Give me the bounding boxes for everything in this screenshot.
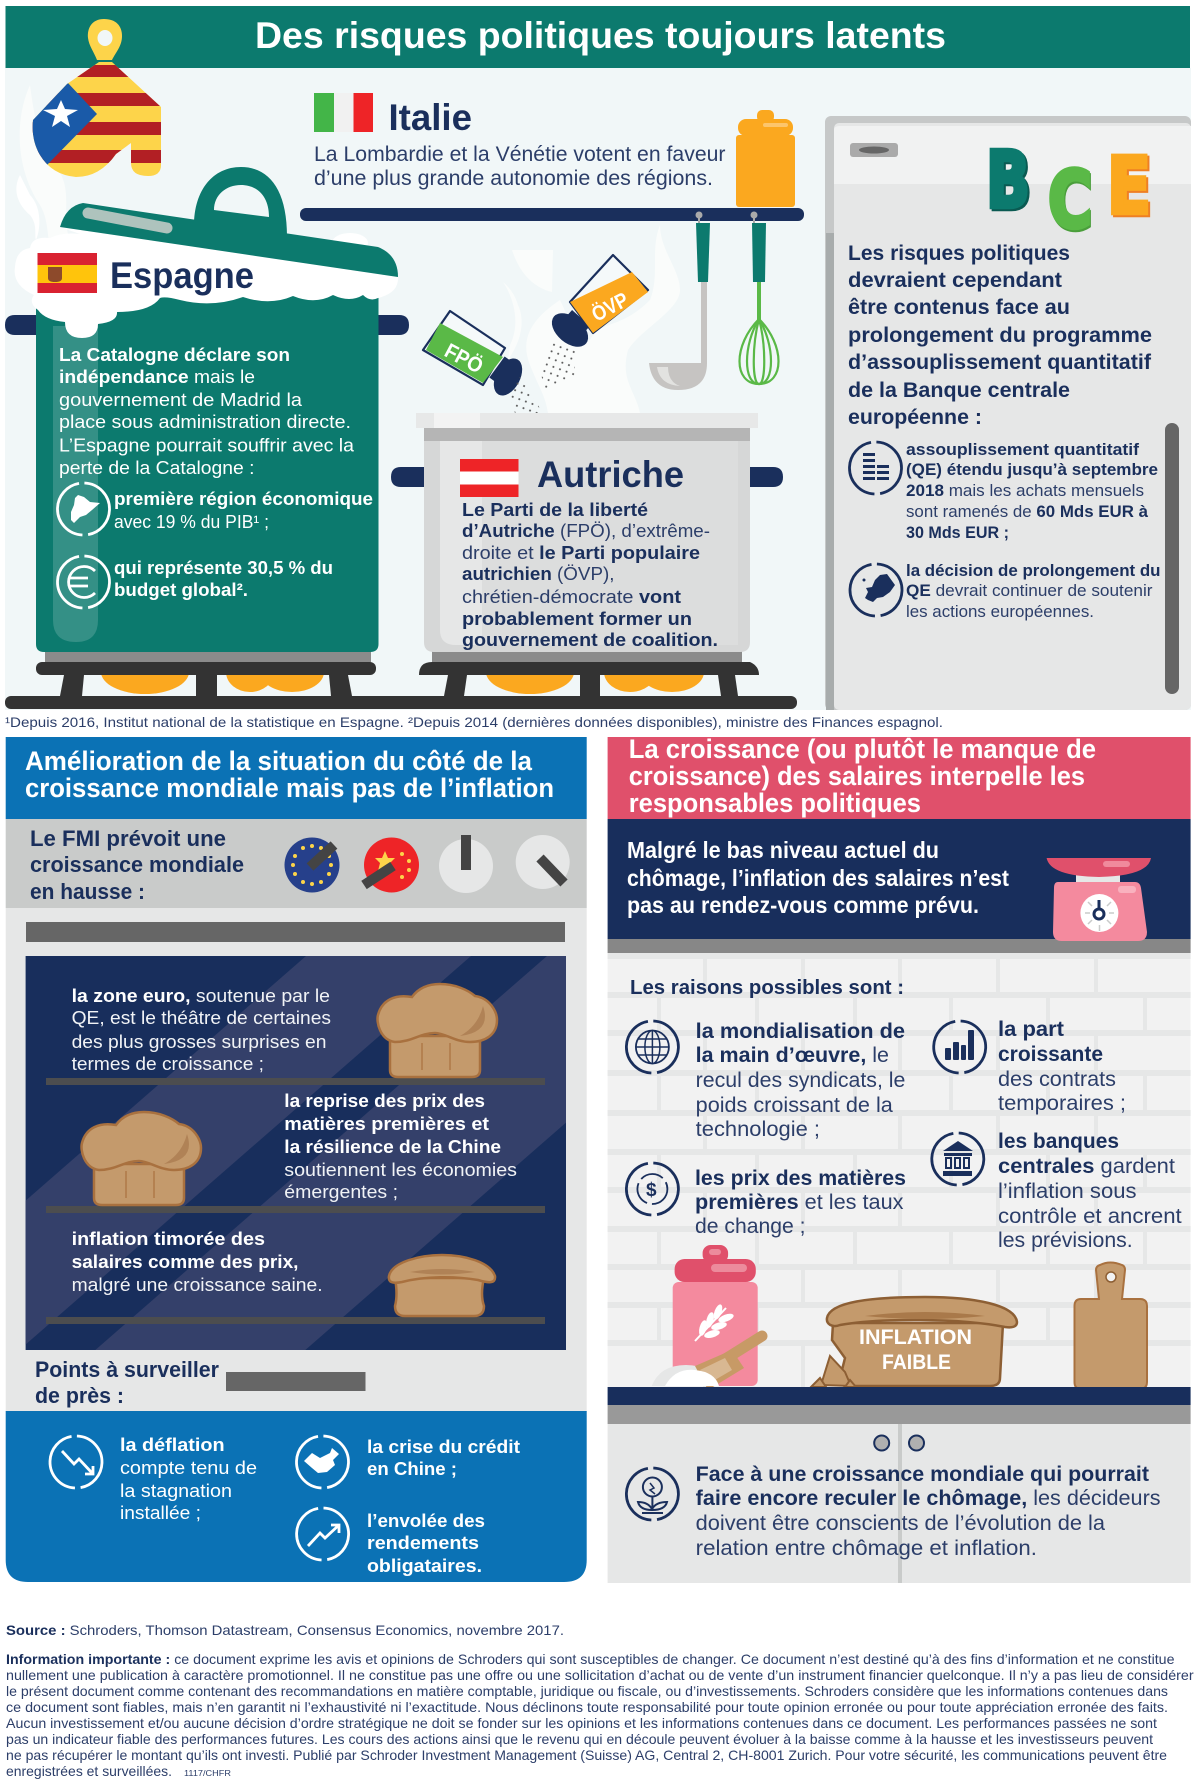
text: BCE intro: prolongement du programme: [848, 323, 1152, 347]
text: Espagne body: L’Espagne pourrait souffrir avec la: [59, 436, 355, 456]
pot base: [45, 650, 371, 662]
text: QE extension: 30 Mds EUR ;: [906, 523, 1009, 542]
heading: growth and inflation: croissance mondiale mais pas de l’inflation: [25, 773, 554, 803]
title banner: Des risques politiques toujours latents: [255, 15, 946, 56]
title banner: [6, 6, 1190, 68]
pot base: [432, 650, 742, 662]
dial: China: [364, 838, 419, 892]
legal notice: le présent document comme contenant des recommandations en matière comptable, juridique ou fiscale, ou d’investissements. Schroders considère que les informations contenues dans: [6, 1683, 1168, 1699]
wheat: [695, 1303, 735, 1341]
text: credit crisis: la crise du crédit: [367, 1436, 520, 1457]
burner Spain: [36, 662, 376, 696]
text: temporary contracts: la part: [998, 1018, 1064, 1041]
dial: blank up: [439, 835, 493, 893]
text: labour globalisation: poids croissant de la: [696, 1094, 893, 1117]
text: Espagne body: place sous administration directe.: [59, 412, 351, 432]
text: temporary contracts: croissante: [998, 1043, 1103, 1066]
icon: plant with bulb: [626, 1467, 679, 1521]
text: central banks: les banques: [998, 1130, 1119, 1153]
text: Autriche body: gouvernement de coalition.: [462, 629, 718, 650]
heading: Italie: Italie: [388, 97, 472, 138]
band: wage inflation: pas au rendez-vous comme prévu.: [627, 892, 979, 918]
heading: growth and inflation: Amélioration de la situation du côté de la: [25, 746, 533, 776]
steam clouds: [16, 85, 680, 413]
legal notice: Information importante : ce document exprime les avis et opinions de Schroders qui sont susceptibles de changer. Ce document n’est destiné qu’à des fins d’information et ne constitue: [6, 1651, 1175, 1667]
heading: Espagne: Espagne: [110, 255, 254, 296]
text: Autriche body: Le Parti de la liberté: [462, 499, 648, 520]
icon: flour jar: [652, 1245, 762, 1390]
dial: euro zone: [284, 838, 340, 892]
shaker: FPÖ: [423, 311, 528, 400]
text: first economic region: [114, 489, 373, 532]
heading: wages: croissance) des salaires interpelle les: [629, 761, 1085, 791]
band: FMI forecast: [6, 819, 587, 908]
text: Autriche body: autrichien (ÖVP),: [462, 563, 614, 584]
text: deflation: installée ;: [120, 1502, 201, 1523]
text: QE decision: les actions européennes.: [906, 602, 1094, 621]
burner Austria: [419, 662, 759, 696]
band: wage inflation: [608, 819, 1191, 939]
heading: possible reasons: Les raisons possibles sont :: [630, 977, 904, 999]
text: first economic region: avec 19 % du PIB¹ ;: [114, 512, 269, 532]
letters BCE: E: [1107, 142, 1151, 232]
stoves and flames: [5, 662, 797, 709]
heading: points to watch: Points à surveiller: [35, 1357, 219, 1382]
text: central banks: l’inflation sous: [998, 1180, 1136, 1203]
text: deflation: [120, 1434, 257, 1523]
text: temporary contracts: [998, 1018, 1126, 1115]
legal notice: [6, 1651, 1194, 1779]
icon: euro: [57, 555, 110, 609]
legal notice: ce document sont fiables, mais n’en garantit ni l’exhaustivité ni l’exactitude. Nous déclinons toute responsabilité pour toute opinion erronée ou pour toute appréciation erronée des faits.: [6, 1699, 1168, 1715]
heading: wages: [608, 734, 1191, 819]
text: commodity prices and exchange rates: de change ;: [695, 1215, 806, 1238]
text: euro zone: QE, est le théâtre de certaines: [72, 1007, 331, 1028]
text: central banks: centrales gardent: [998, 1155, 1175, 1178]
text: QE extension: sont ramenés de 60 Mds EUR à: [906, 502, 1149, 521]
text: budget share: qui représente 30,5 % du: [114, 558, 333, 578]
band: FMI forecast: croissance mondiale: [30, 852, 244, 877]
pot rim: [416, 413, 758, 428]
legal notice: Aucun investissement et/ou aucune décision d’ordre stratégique ne doit se fonder sur les opinions et les informations contenues dans ce document. Les performances passées ne sont: [6, 1715, 1157, 1731]
knob: [909, 1436, 924, 1450]
cabinet: [608, 1424, 1191, 1583]
boiling foam: [15, 227, 398, 338]
heading: wages: responsables politiques: [629, 788, 921, 818]
text: temporary contracts: des contrats: [998, 1068, 1116, 1091]
text: temporary contracts: temporaires ;: [998, 1092, 1126, 1115]
text: bond yields: obligataires.: [367, 1555, 482, 1576]
icon: Catalan flag oven mitt: [25, 19, 165, 180]
legal notice: ne pas récupérer le montant qu’ils ont investi. Publié par Schroder Investment Management (Suisse) AG, Central 2, CH-8001 Zurich. Pour votre sécurité, les communications peuvent être: [6, 1747, 1167, 1763]
text: BCE intro: Les risques politiques: [848, 241, 1070, 265]
text: credit crisis: en Chine ;: [367, 1458, 457, 1479]
oven shelves: [46, 1078, 545, 1324]
stove base: [5, 696, 797, 709]
text: bond yields: [367, 1510, 485, 1576]
text: Autriche body: chrétien-démocrate vont: [462, 586, 681, 607]
text: commodity prices and exchange rates: les prix des matières: [695, 1167, 906, 1190]
legal notice: nullement une publication à caractère promotionnel. Il ne constitue pas une offre ou une sollicitation d’achat ou de vente d’un instrument financier quelconque. Il n’y a pas lieu de considérer: [6, 1667, 1194, 1683]
text: first economic region: première région économique: [114, 489, 373, 509]
icon: dollar exchange: $: [646, 1180, 657, 1201]
pot handles: [391, 467, 783, 487]
text: BCE intro: européenne :: [848, 405, 982, 429]
text: Espagne body: [59, 345, 355, 478]
icon: Europe map: [849, 563, 903, 617]
fridge badge: [850, 143, 898, 157]
icon: cutting board: [1074, 1262, 1147, 1389]
text: Autriche body: d’Autriche (FPÖ), d’extrême-: [462, 520, 710, 541]
text: Italie body: La Lombardie et la Vénétie votent en faveur: [314, 143, 726, 166]
text: conclusion: Face à une croissance mondiale qui pourrait: [696, 1463, 1149, 1486]
text: euro zone: des plus grosses surprises en: [72, 1031, 326, 1052]
text: commodities: la résilience de la Chine: [284, 1136, 501, 1157]
brick wall: [607, 953, 1191, 1387]
text: QE decision: la décision de prolongement du: [906, 561, 1160, 580]
icon: whisk: [740, 212, 778, 384]
letters BCE: B: [986, 136, 1030, 226]
text: BCE intro: de la Banque centrale: [848, 378, 1070, 402]
text: deflation: la déflation: [120, 1434, 225, 1455]
text: Autriche body: probablement former un: [462, 608, 692, 629]
text: QE extension: (QE) étendu jusqu’à septembre: [906, 460, 1158, 479]
text: euro zone: la zone euro, soutenue par le: [72, 985, 330, 1006]
icon: orange jar: [736, 110, 795, 207]
flames: [101, 675, 704, 694]
text: BCE intro: devraient cependant: [848, 268, 1062, 292]
icon: globe: [626, 1020, 679, 1074]
counter top: [608, 1387, 1191, 1405]
pot body: [36, 280, 378, 652]
icon: ladle: [649, 212, 710, 390]
text: budget share: [114, 558, 333, 600]
text: Espagne body: perte de la Catalogne :: [59, 458, 254, 478]
text: labour globalisation: recul des syndicats, le: [696, 1069, 905, 1092]
legal notice: 1117/CHFR: [184, 1768, 231, 1778]
text: bond yields: rendements: [367, 1532, 479, 1553]
panel: Autriche pot: [391, 413, 783, 662]
flag: Italy: [314, 93, 373, 132]
text: QE extension: [906, 440, 1158, 542]
flag: Spain: [38, 253, 97, 293]
band: FMI forecast: Le FMI prévoit une: [30, 826, 226, 851]
text: commodity prices and exchange rates: premières et les taux: [695, 1191, 904, 1214]
legal notice: enregistrées et surveillées.: [6, 1763, 172, 1779]
text: commodities: émergentes ;: [284, 1181, 398, 1202]
text: euro zone: [72, 985, 331, 1074]
fridge handle: [1165, 423, 1179, 694]
text: labour globalisation: technologie ;: [696, 1118, 820, 1141]
flag: Austria: [460, 459, 518, 497]
shelf with jar and utensils: [300, 110, 804, 390]
panel: BCE fridge: [825, 116, 1191, 710]
icon: China map: [296, 1435, 349, 1489]
footnote: ¹Depuis 2016, Institut national de la statistique en Espagne. ²Depuis 2014 (dernières données disponibles), ministre des Finances espagnol.: [5, 714, 943, 730]
text: credit crisis: [367, 1436, 520, 1479]
band: wage inflation: Malgré le bas niveau actuel du: [627, 837, 939, 863]
text: commodities: [284, 1090, 517, 1202]
text: central banks: [998, 1130, 1182, 1252]
icon: bread loaf with label: FAIBLE: [882, 1351, 951, 1374]
text: Espagne body: indépendance mais le: [59, 367, 255, 387]
text: central banks: les prévisions.: [998, 1229, 1133, 1252]
text: euro zone: termes de croissance ;: [72, 1053, 264, 1074]
panel: global growth: [6, 737, 587, 1582]
heading: Autriche: Autriche: [537, 454, 684, 495]
icon: muffin loaf middle: [82, 1112, 201, 1205]
text: deflation: la stagnation: [120, 1480, 232, 1501]
panel: wages: [607, 734, 1191, 1583]
icon: flat loaf: [389, 1255, 495, 1316]
pot lid: [60, 167, 398, 277]
icon: dollar exchange: [626, 1162, 679, 1216]
scoop and flour: [652, 1365, 719, 1386]
pot body: [424, 428, 750, 652]
text: Italie body: [314, 143, 726, 190]
pot handles: [5, 315, 409, 335]
text: Italie body: d’une plus grande autonomie des régions.: [314, 167, 713, 190]
text: Espagne body: La Catalogne déclare son: [59, 345, 290, 365]
text: Autriche body: [462, 499, 718, 650]
text: wages inflation: malgré une croissance saine.: [72, 1274, 323, 1295]
text: labour globalisation: [696, 1020, 905, 1141]
counter edge: [608, 1405, 1191, 1424]
icon: Catalonia map: [57, 482, 110, 536]
icon: QE bars: [849, 441, 902, 495]
source line: Source : Schroders, Thomson Datastream, Consensus Economics, novembre 2017.: [6, 1622, 564, 1638]
text: commodities: matières premières et: [284, 1113, 489, 1134]
icon: rising yields: [296, 1507, 349, 1561]
panel: Italie: [314, 93, 726, 190]
shaker: ÖVP: ÖVP: [588, 288, 632, 327]
text: deflation: compte tenu de: [120, 1457, 257, 1478]
knob: [874, 1436, 889, 1450]
text: central banks: contrôle et ancrent: [998, 1205, 1182, 1228]
oven window: [26, 956, 566, 1350]
text: Autriche body: droite et le Parti populaire: [462, 542, 700, 563]
heading: growth and inflation: [6, 737, 587, 819]
text: QE extension: assouplissement quantitatif: [906, 440, 1139, 459]
text: conclusion: faire encore reculer le chômage, les décideurs: [696, 1487, 1161, 1510]
letters BCE: C: [1048, 156, 1092, 246]
oven handle bar: [26, 922, 565, 942]
panel: watch list: [6, 1411, 587, 1582]
heading: points to watch: [35, 1357, 366, 1408]
icon: kitchen scale: [1047, 858, 1151, 941]
dial: blank down right: [516, 835, 570, 889]
shakers with seasoning: [423, 255, 648, 413]
heading: wages: La croissance (ou plutôt le manque de: [629, 734, 1096, 764]
text: QE extension: 2018 mais les achats mensuels: [906, 481, 1144, 500]
shaker: ÖVP: [546, 255, 648, 353]
text: BCE intro: d’assouplissement quantitatif: [848, 350, 1152, 374]
text: commodities: la reprise des prix des: [284, 1090, 485, 1111]
band: FMI forecast: en hausse :: [30, 879, 145, 904]
icon: bar chart: [933, 1020, 987, 1074]
band: wage inflation: chômage, l’inflation des salaires n’est: [627, 865, 1009, 891]
panel: Espagne pot: [5, 167, 409, 662]
text: commodities: soutiennent les économies: [284, 1159, 517, 1180]
top kitchen background: [5, 68, 1191, 710]
letters BCE: [986, 136, 1151, 246]
icon: muffin loaf top: [378, 984, 497, 1077]
text: QE decision: [906, 561, 1160, 621]
heading: points to watch: de près :: [35, 1383, 124, 1408]
crumbs: [811, 1356, 856, 1387]
text: QE decision: QE devrait continuer de soutenir: [906, 581, 1153, 600]
shaker: FPÖ: FPÖ: [441, 339, 487, 378]
seasoning dots: [508, 340, 575, 413]
text: Espagne body: gouvernement de Madrid la: [59, 390, 303, 410]
icon: central bank: [931, 1132, 985, 1186]
pot highlight: [53, 326, 98, 642]
icon: bread loaf with label: [811, 1297, 1017, 1387]
legal notice: pas un indicateur fiable des performances futures. Les cours des actions ainsi que le revenu qui en découle peuvent évoluer à la baisse comme à la hausse et les investisseurs peuvent: [6, 1731, 1153, 1747]
text: BCE intro: être contenus face au: [848, 295, 1070, 319]
text: bond yields: l’envolée des: [367, 1510, 485, 1531]
text: budget share: budget global².: [114, 580, 248, 600]
icon: deflation: [49, 1435, 103, 1489]
ledge: [608, 939, 1191, 953]
text: conclusion: doivent être conscients de l’évolution de la: [696, 1512, 1105, 1535]
text: wages inflation: salaires comme des prix,: [72, 1251, 298, 1272]
text: wages inflation: inflation timorée des: [72, 1228, 265, 1249]
text: labour globalisation: la mondialisation de: [696, 1020, 905, 1043]
text: labour globalisation: la main d’œuvre, le: [696, 1044, 889, 1067]
text: conclusion: relation entre chômage et inflation.: [696, 1537, 1037, 1560]
text: wages inflation: [72, 1228, 323, 1295]
text: bread label: INFLATION: [859, 1326, 972, 1349]
text: BCE intro: [848, 241, 1152, 429]
text: commodity prices and exchange rates: [695, 1167, 906, 1238]
text: conclusion: [696, 1463, 1161, 1560]
